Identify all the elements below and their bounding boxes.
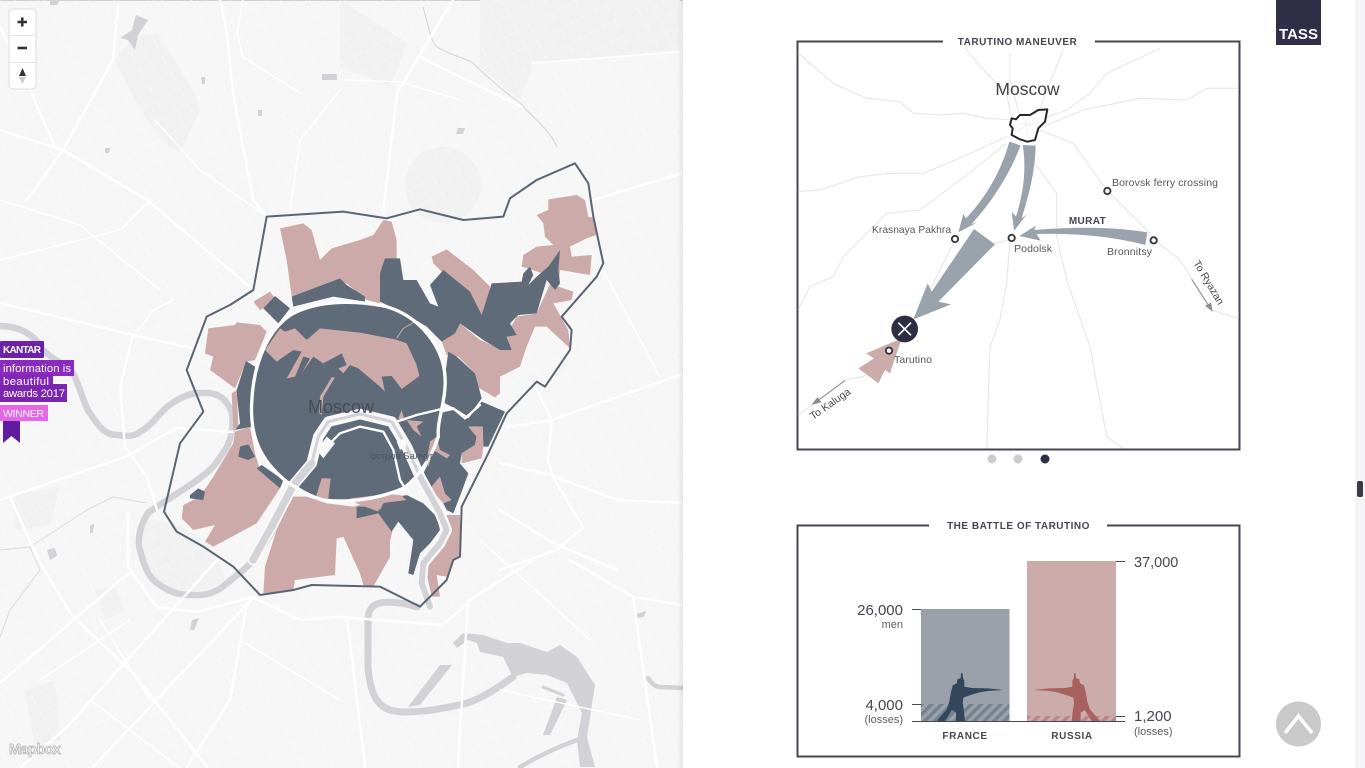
value: 4,000 losses: 4,000 xyxy=(865,697,903,714)
value: 1,200 losses xyxy=(1134,708,1173,738)
value: 4,000 losses: (losses) xyxy=(864,714,903,726)
icon: French soldier xyxy=(937,673,1003,721)
arrow: to Kaluga xyxy=(813,381,845,404)
label: Bronnitsy: Bronnitsy xyxy=(1107,246,1153,258)
label: To Ryazan: To Ryazan xyxy=(1190,258,1226,307)
road network xyxy=(0,0,683,768)
burned area: outskirts xyxy=(182,195,597,597)
icon: compass xyxy=(19,68,26,84)
heading: Tarutino maneuver: TARUTINO MANEUVER xyxy=(958,37,1077,48)
arrow: main advance to Tarutino xyxy=(913,229,995,319)
label: France: FRANCE xyxy=(942,731,988,742)
value: 1,200 losses: (losses) xyxy=(1134,726,1173,738)
logo: TASS xyxy=(1276,0,1321,45)
button: back to top xyxy=(1276,702,1321,746)
badge: Kantar award ribbon: beautiful xyxy=(3,376,49,388)
burned area: inside the ring xyxy=(265,322,483,512)
label: Mapbox attribution: Mapbox xyxy=(9,742,61,758)
white islands xyxy=(317,437,407,458)
label: Tarutino: Tarutino xyxy=(894,354,932,366)
value: 26,000 men: men xyxy=(882,619,903,631)
arrow: French route to Krasnaya Pakhra xyxy=(958,142,1021,232)
logo: TASS: TASS xyxy=(1279,26,1318,43)
icon: Moscow outline xyxy=(1010,109,1047,142)
icon: battle marker xyxy=(891,316,918,342)
value: 26,000 men xyxy=(857,602,903,631)
label: Moscow: Moscow xyxy=(308,397,375,417)
label: Murat: MURAT xyxy=(1069,216,1106,227)
park areas xyxy=(15,0,680,745)
arrow: Murat xyxy=(1019,226,1147,245)
axis lines and ticks xyxy=(912,562,1125,722)
value: 4,000 losses xyxy=(864,697,903,726)
icon: location dots xyxy=(886,188,1157,354)
river basin: southern docks xyxy=(47,0,646,767)
badge: Kantar award ribbon: information is xyxy=(3,363,71,375)
carousel dots xyxy=(988,454,1050,464)
roads on small map xyxy=(798,48,1238,448)
outline: city boundary xyxy=(164,163,603,607)
bar: Russia xyxy=(1027,561,1116,721)
icon: Moscow boundary and burned districts xyxy=(164,163,603,607)
river and ring roads xyxy=(251,302,480,607)
river: Moskva xyxy=(0,326,682,767)
arrow: to Ryazan xyxy=(1192,279,1212,311)
label: Balchug island: остров Балчуг xyxy=(371,451,434,462)
heading: The Battle of Tarutino: THE BATTLE OF TARUTINO xyxy=(947,521,1090,532)
badge: Kantar award ribbon xyxy=(0,341,74,443)
icon: zoom out xyxy=(18,47,27,49)
icon: zoom in xyxy=(18,18,27,26)
label: To Kaluga: To Kaluga xyxy=(808,386,853,422)
value: 37,000: 37,000 xyxy=(1134,555,1178,571)
panel: Battle of Tarutino chart xyxy=(798,520,1240,756)
panel: right column background xyxy=(677,0,1365,768)
burned area: dark core xyxy=(190,250,560,575)
street grid xyxy=(0,0,683,768)
main ring xyxy=(251,302,445,501)
label: Podolsk: Podolsk xyxy=(1014,243,1053,255)
label: Moscow: Moscow xyxy=(995,79,1060,99)
map controls xyxy=(9,9,36,89)
icon: Russian soldier xyxy=(1033,673,1100,721)
badge: Kantar award ribbon: awards 2017 xyxy=(3,388,65,400)
label: Russia: RUSSIA xyxy=(1051,731,1093,742)
arrow: French route to Podolsk xyxy=(1012,145,1036,231)
badge: Kantar award ribbon: KANTAR xyxy=(3,345,42,356)
streams xyxy=(0,7,557,637)
label: Borovsk ferry crossing: Borovsk ferry crossing xyxy=(1112,177,1218,189)
value: 1,200 losses: 1,200 xyxy=(1134,708,1172,725)
arrow: Russian counterattack xyxy=(858,338,902,383)
bar: France xyxy=(921,609,1010,721)
scrollbar thumb xyxy=(1357,481,1363,497)
badge: Kantar award ribbon: WINNER xyxy=(3,408,44,420)
panel: Tarutino maneuver map xyxy=(798,36,1240,450)
label: Krasnaya Pakhra: Krasnaya Pakhra xyxy=(872,225,951,236)
value: 26,000 men: 26,000 xyxy=(857,602,903,619)
